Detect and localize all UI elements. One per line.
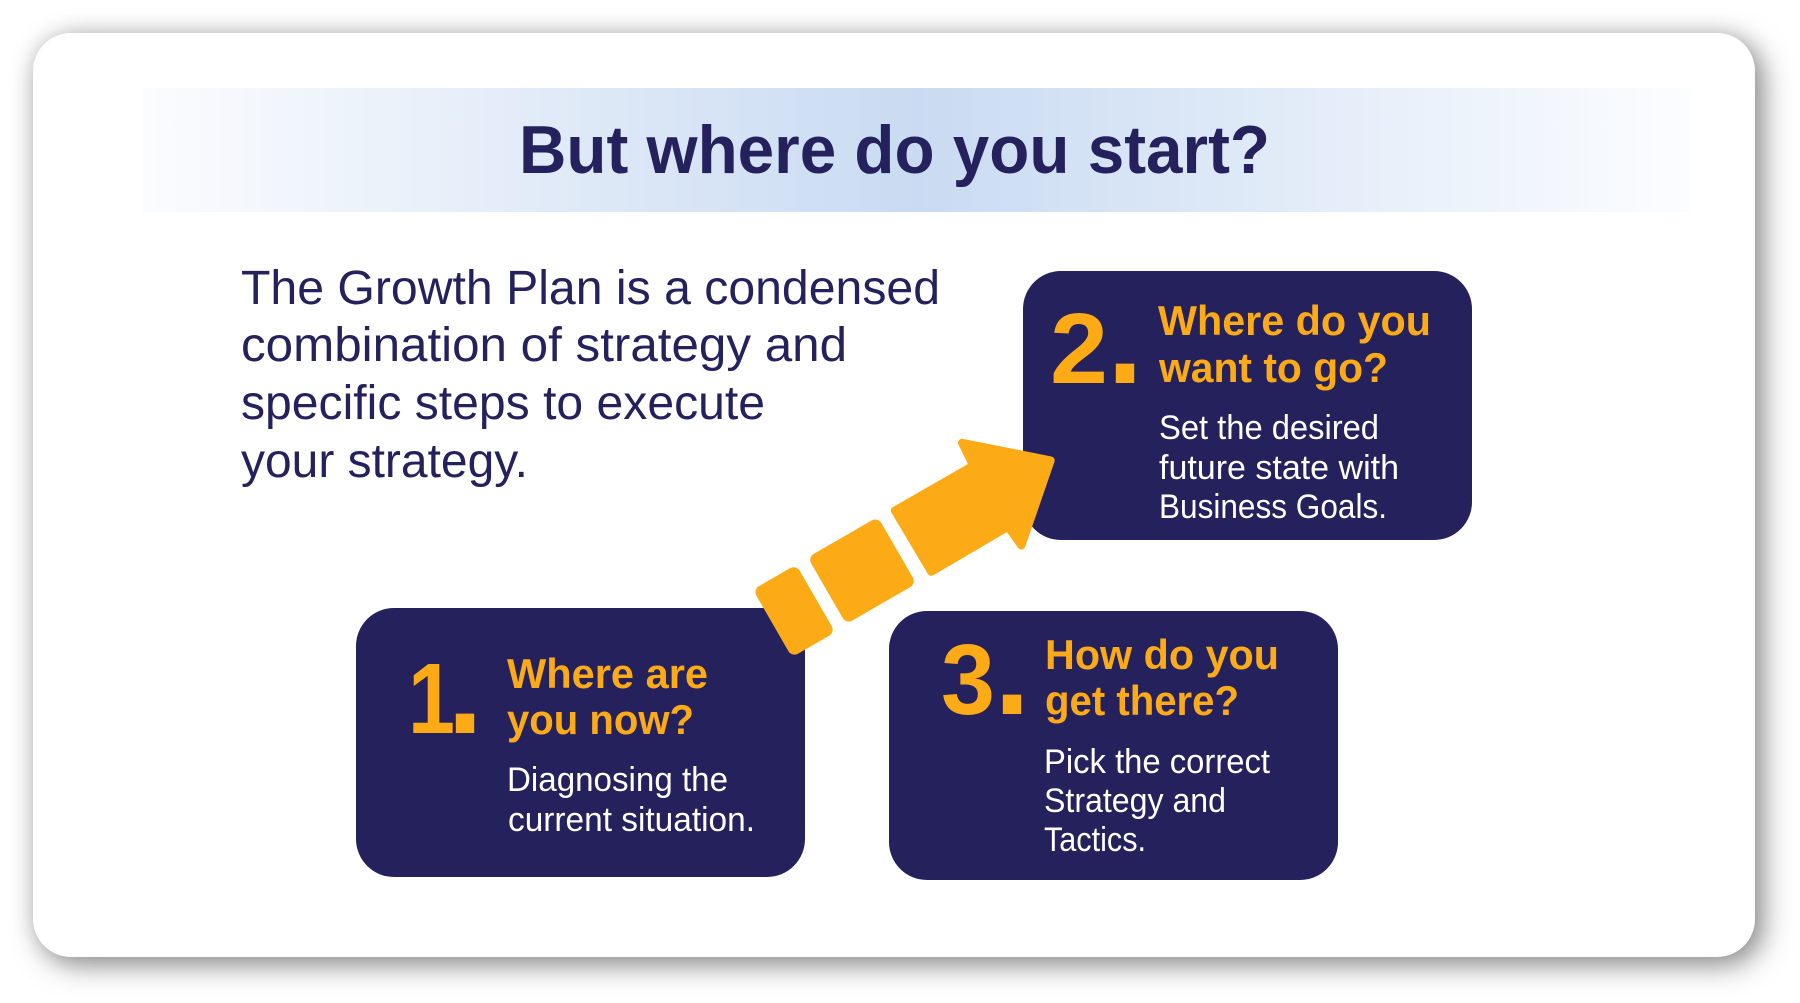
panel: step 3: Tactics.: [1044, 821, 1146, 859]
step 3 description: Pick the correct: [1044, 743, 1271, 781]
panel: step 1: you now?: [507, 696, 694, 743]
panel: step 2: Business Goals.: [1159, 488, 1387, 526]
panel: step 2: [1023, 265, 1472, 540]
step 3 period: .: [994, 596, 1030, 742]
step 1 description: Diagnosing the: [507, 761, 728, 799]
step 3 heading: How do you: [1045, 631, 1279, 678]
title banner: [143, 88, 1690, 212]
intro paragraph: The Growth Plan is a condensed: [241, 262, 940, 315]
panel: step 1: current situation.: [508, 801, 755, 839]
panel: step 2: want to go?: [1158, 344, 1388, 391]
step 1 number: 1: [408, 643, 455, 755]
intro paragraph: [241, 262, 940, 488]
title: But where do you start?: [519, 112, 1270, 188]
panel: step 2: future state with: [1159, 449, 1399, 487]
panel: step 3: [889, 596, 1338, 880]
step 2 description: Set the desired: [1159, 409, 1379, 447]
intro paragraph: specific steps to execute: [241, 377, 765, 430]
intro paragraph: your strategy.: [241, 435, 528, 488]
panel: step 3: get there?: [1045, 677, 1239, 724]
intro paragraph: combination of strategy and: [241, 319, 847, 372]
step 1 period: .: [447, 615, 483, 761]
step 1 heading: Where are: [507, 650, 708, 697]
step 2 period: .: [1107, 265, 1143, 411]
step 2 heading: Where do you: [1158, 297, 1431, 344]
panel: step 1: [356, 608, 805, 877]
panel: step 3: Strategy and: [1044, 782, 1226, 820]
step 2 number: 2: [1050, 293, 1108, 405]
arrow: segmented rising arrow: [753, 443, 1051, 657]
step 3 number: 3: [941, 624, 995, 736]
